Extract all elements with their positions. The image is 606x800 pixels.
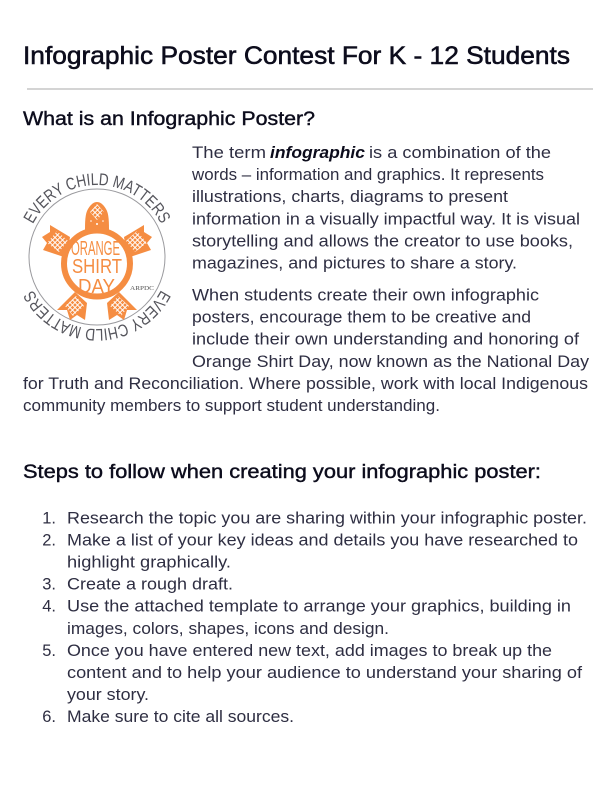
step 5: content and to help your audience to understand your sharing of <box>67 664 582 682</box>
logo text: orange shirt day: ORANGE <box>71 238 120 260</box>
logo: orange shirt day turtle badge <box>23 173 171 341</box>
step 4: images, colors, shapes, icons and design. <box>67 620 389 638</box>
step 2: highlight graphically. <box>67 554 231 572</box>
logo text: orange shirt day <box>71 238 122 298</box>
step 5: Once you have entered new text, add images to break up the <box>67 642 552 660</box>
paragraph: student guidance: for Truth and Reconciliation. Where possible, work with local Indigenous <box>23 375 588 393</box>
step 5: 5. <box>42 642 56 660</box>
step 4 <box>42 598 571 638</box>
step 5: your story. <box>67 686 149 704</box>
numbered list of steps <box>42 509 587 726</box>
paragraph: student guidance <box>23 286 590 415</box>
step 6: 6. <box>42 708 56 726</box>
step 4: 4. <box>42 598 56 616</box>
paragraph: definition of infographic: information in a visually impactful way. It is visual <box>192 210 580 228</box>
paragraph: student guidance: When students create their own infographic <box>192 286 539 304</box>
step 4: Use the attached template to arrange your graphics, building in <box>67 598 571 616</box>
heading: what is an infographic poster: What is an Infographic Poster? <box>23 109 315 130</box>
paragraph: student guidance: posters, encourage them to be creative and <box>192 309 531 327</box>
step 3: 3. <box>42 576 56 594</box>
step 3: Create a rough draft. <box>67 576 233 594</box>
paragraph: definition of infographic: The term <box>192 144 266 162</box>
paragraph: student guidance: Orange Shirt Day, now known as the National Day <box>192 353 590 371</box>
step 2: Make a list of your key ideas and details you have researched to <box>67 531 578 549</box>
title: Infographic Poster Contest For K - 12 Students <box>23 42 570 70</box>
paragraph: definition of infographic <box>191 144 580 272</box>
paragraph: definition of infographic: magazines, and pictures to share a story. <box>192 254 517 272</box>
step 6: Make sure to cite all sources. <box>67 708 294 726</box>
paragraph: definition of infographic: words – information and graphics. It represents <box>191 166 544 184</box>
paragraph: student guidance: include their own understanding and honoring of <box>192 331 579 349</box>
paragraph: definition of infographic: illustrations, charts, diagrams to present <box>192 188 508 206</box>
step 2: 2. <box>42 531 56 549</box>
paragraph: definition of infographic: is a combination of the <box>369 144 551 162</box>
logo text: orange shirt day: SHIRT <box>72 256 122 278</box>
turtle <box>42 202 152 320</box>
step 1: Research the topic you are sharing within your infographic poster. <box>67 509 587 527</box>
paragraph: definition of infographic: infographic <box>270 144 365 162</box>
logo text: orange shirt day: DAY <box>78 276 115 298</box>
logo credit: ARPDC <box>130 285 154 292</box>
step 2 <box>42 531 578 572</box>
arc text: bottom: EVERY CHILD MATTERS <box>24 290 171 341</box>
paragraph: definition of infographic: storytelling and allows the creator to use books, <box>192 232 573 250</box>
step 1: 1. <box>42 509 56 527</box>
arc text: top: EVERY CHILD MATTERS <box>23 173 170 224</box>
step 5 <box>42 642 582 704</box>
heading: steps to follow: Steps to follow when creating your infographic poster: <box>23 462 541 483</box>
paragraph: student guidance: community members to support student understanding. <box>23 397 440 415</box>
